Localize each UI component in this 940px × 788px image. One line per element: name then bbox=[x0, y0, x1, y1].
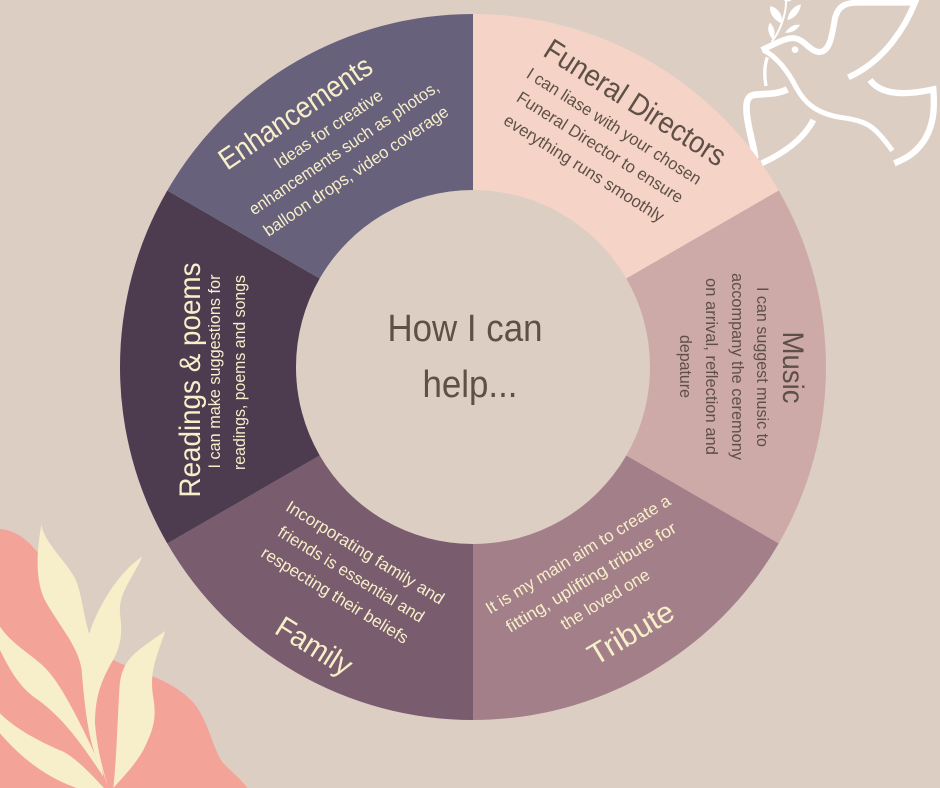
text: Music body: depature bbox=[676, 335, 695, 398]
text: Enhancements body: balloon drops, video coverage bbox=[260, 102, 452, 240]
text: Funeral Directors body bbox=[500, 64, 705, 226]
center title: How I can help...: help... bbox=[422, 364, 518, 406]
icon: white dove with olive branch bbox=[746, 0, 934, 163]
text: Funeral Directors body: everything runs smoothly bbox=[500, 111, 668, 226]
text: Family body: Incorporating family and bbox=[283, 497, 448, 608]
icon: coral and cream leaves bbox=[0, 525, 247, 788]
center title: How I can help...: How I can bbox=[388, 308, 542, 350]
cream leaves bbox=[38, 525, 142, 788]
heading: Funeral Directors: Funeral Directors bbox=[538, 33, 732, 173]
text: Tribute body: the loved one bbox=[557, 565, 653, 634]
text: Music body: I can suggest music to bbox=[753, 287, 772, 447]
heading: Tribute: Tribute bbox=[582, 595, 680, 672]
text: Tribute body: fitting, uplifting tribute for bbox=[502, 518, 680, 636]
text: Family body bbox=[258, 497, 448, 648]
panel: Family segment bbox=[167, 456, 473, 720]
text: Readings and poems body: readings, poems and songs bbox=[230, 275, 249, 470]
text: Funeral Directors body: Funeral Director to ensure bbox=[513, 88, 687, 207]
heading: Readings & poems: Readings & poems bbox=[174, 262, 207, 498]
text: Family body: friends is essential and bbox=[275, 522, 428, 626]
panel: Readings and poems segment bbox=[120, 190, 320, 544]
text: Family body: respecting their beliefs bbox=[258, 543, 412, 648]
panel: Music segment bbox=[626, 190, 826, 544]
panel: Tribute segment bbox=[473, 456, 779, 720]
text: Readings and poems body bbox=[205, 274, 249, 470]
coral blob bbox=[0, 529, 247, 788]
center title: How I can help... bbox=[388, 308, 542, 406]
heading: Music: Music bbox=[776, 332, 809, 404]
text: Enhancements body: Ideas for creative bbox=[270, 86, 386, 173]
text: Tribute body: It is my main aim to create a bbox=[482, 491, 675, 618]
heading: Enhancements: Enhancements bbox=[213, 50, 379, 177]
text: Music body bbox=[676, 273, 772, 460]
text: Readings and poems body: I can make suggestions for bbox=[205, 274, 224, 468]
text: Enhancements body: enhancements such as photos, bbox=[245, 77, 443, 219]
text: Music body: accompany the ceremony bbox=[728, 273, 747, 460]
panel: Funeral Directors segment bbox=[473, 14, 779, 278]
text: Music body: on arrival, reflection and bbox=[702, 278, 721, 455]
panel: Enhancements segment bbox=[167, 14, 473, 278]
text: Funeral Directors body: I can liase with your chosen bbox=[523, 64, 705, 189]
heading: Family: Family bbox=[269, 610, 358, 683]
